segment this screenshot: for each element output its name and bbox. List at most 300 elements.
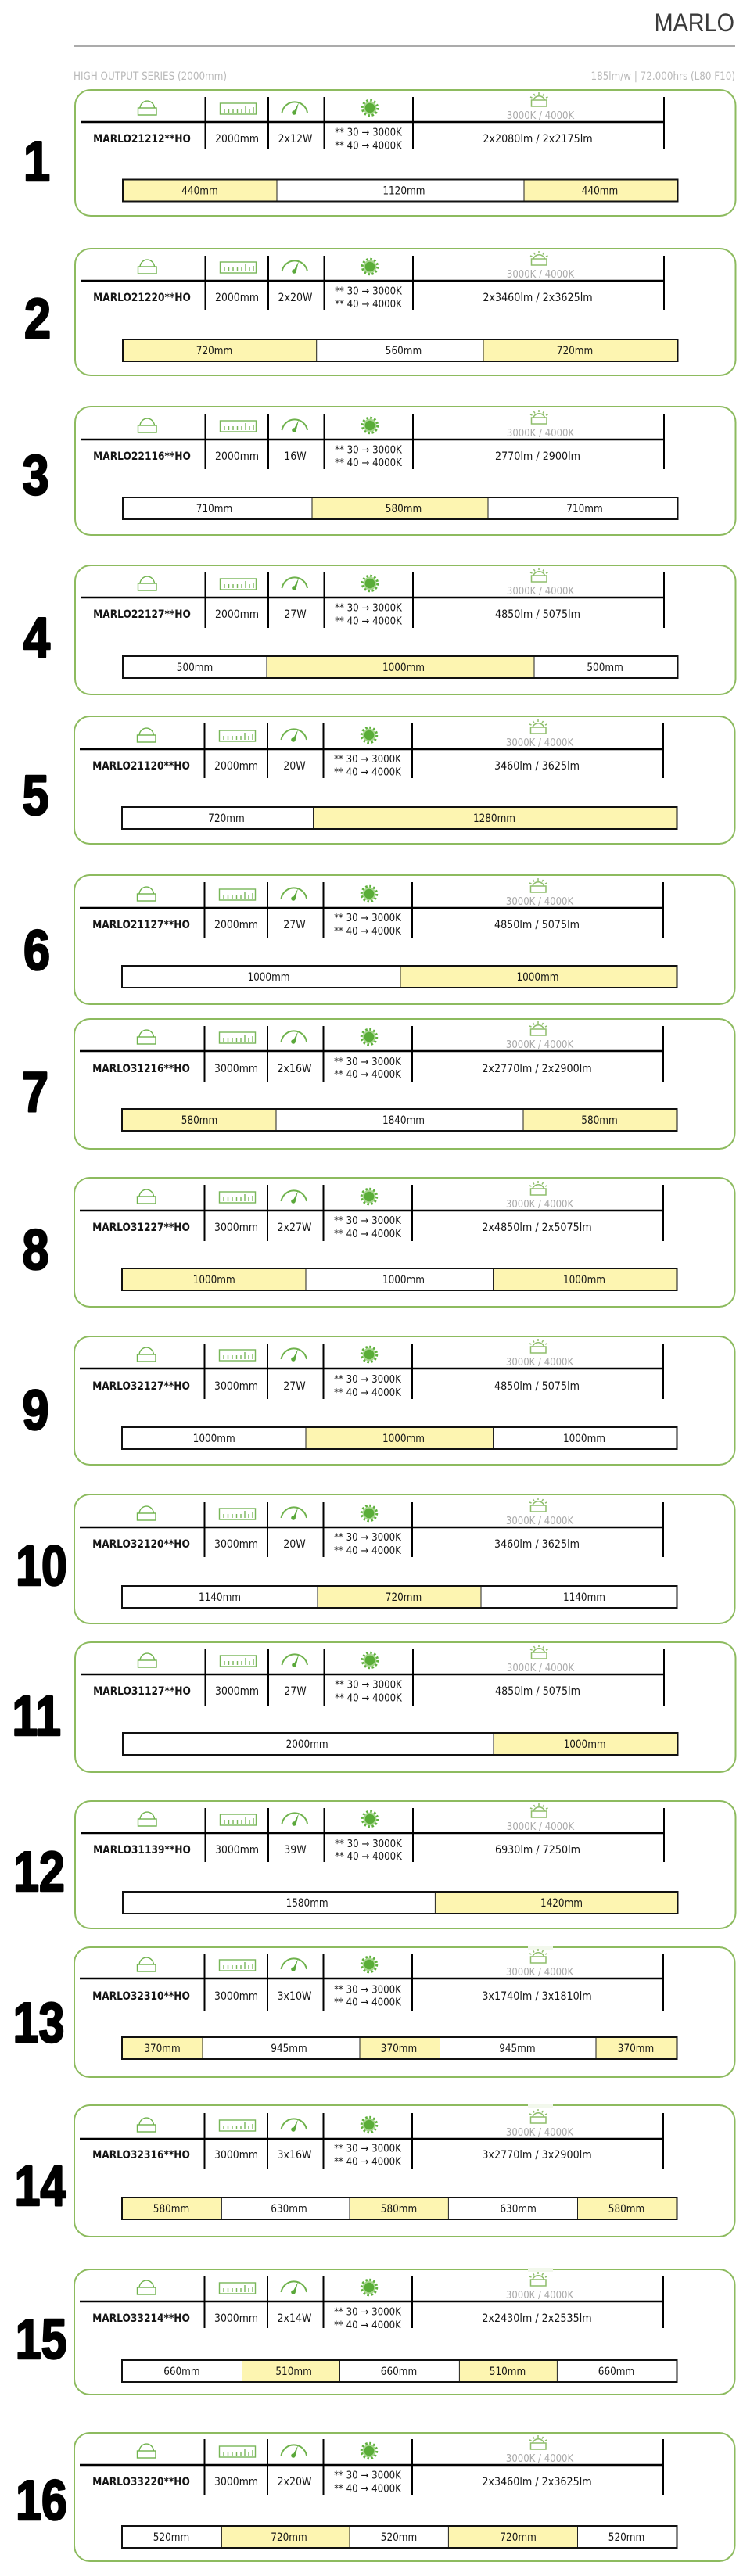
colour codes: ** 40 → 4000K bbox=[335, 615, 403, 627]
icon: ruler bbox=[221, 579, 257, 590]
icon: lit lamp bbox=[530, 1803, 547, 1817]
colour temperature heading: 3000K / 4000K bbox=[506, 895, 574, 907]
length bar: 1000mm bbox=[382, 1433, 425, 1445]
icon: sun bbox=[361, 1957, 377, 1972]
length bar: 510mm bbox=[490, 2366, 526, 2378]
icon: gauge bbox=[282, 1958, 307, 1971]
power: 39W bbox=[284, 1844, 307, 1857]
colour codes bbox=[334, 1983, 402, 2008]
model: MARLO22127**HO bbox=[93, 608, 191, 621]
length: 2000mm bbox=[214, 760, 258, 773]
lumen output: 3460lm / 3625lm bbox=[494, 760, 580, 773]
length bar: 370mm bbox=[381, 2043, 417, 2055]
colour codes bbox=[335, 285, 403, 310]
length bar: 1000mm bbox=[382, 1274, 425, 1286]
colour temperature heading: 3000K / 4000K bbox=[506, 737, 574, 748]
length bar bbox=[122, 1427, 677, 1449]
icon: lamp bbox=[138, 101, 156, 115]
power: 27W bbox=[283, 1380, 306, 1393]
icon: lit lamp bbox=[529, 2109, 547, 2123]
colour codes: ** 40 → 4000K bbox=[335, 139, 403, 152]
length bar: 580mm bbox=[181, 1114, 217, 1127]
colour codes bbox=[334, 911, 402, 937]
icon: lamp bbox=[138, 887, 156, 901]
power: 2x27W bbox=[278, 1222, 311, 1234]
length bar: 710mm bbox=[566, 503, 603, 515]
length bar: 580mm bbox=[153, 2203, 189, 2215]
number 16: 16 bbox=[16, 2468, 67, 2531]
number 7: 7 bbox=[22, 1061, 48, 1124]
table grid bbox=[80, 1502, 663, 1557]
lumen output: 6930lm / 7250lm bbox=[495, 1844, 580, 1857]
colour temperature heading: 3000K / 4000K bbox=[506, 2289, 574, 2301]
colour codes: ** 40 → 4000K bbox=[335, 1849, 403, 1862]
icon: sun bbox=[361, 1029, 377, 1045]
power: 20W bbox=[283, 1538, 306, 1551]
length bar: 720mm bbox=[208, 813, 245, 825]
model: MARLO22116**HO bbox=[93, 450, 191, 463]
length bar bbox=[122, 966, 677, 988]
length bar bbox=[122, 1109, 677, 1131]
lumen output: 2x2770lm / 2x2900lm bbox=[482, 1063, 592, 1075]
table grid bbox=[81, 414, 664, 469]
icon: sun bbox=[361, 2118, 377, 2132]
length bar: 720mm bbox=[271, 2531, 307, 2544]
colour temperature heading: 3000K / 4000K bbox=[507, 585, 575, 597]
colour codes: ** 40 → 4000K bbox=[334, 1067, 402, 1080]
length bar bbox=[123, 1892, 677, 1914]
length: 3000mm bbox=[214, 2476, 258, 2488]
panel 7 bbox=[74, 1019, 735, 1149]
icon: sun bbox=[361, 2280, 377, 2294]
icon: sun bbox=[361, 1347, 377, 1362]
header rule bbox=[74, 45, 735, 47]
number 5: 5 bbox=[22, 765, 49, 827]
number 12: 12 bbox=[13, 1839, 65, 1903]
table grid bbox=[80, 1946, 663, 2011]
length bar: 1120mm bbox=[382, 185, 425, 198]
power: 2x20W bbox=[278, 2476, 311, 2488]
table grid bbox=[80, 723, 663, 778]
lumen output: 2x3460lm / 2x3625lm bbox=[482, 2476, 592, 2488]
length bar: 1580mm bbox=[286, 1897, 328, 1910]
length bar: 500mm bbox=[587, 662, 623, 674]
icon: gauge bbox=[282, 1031, 307, 1044]
table grid bbox=[81, 97, 664, 149]
length bar: 720mm bbox=[500, 2531, 537, 2544]
length: 3000mm bbox=[214, 1063, 258, 1075]
colour codes bbox=[334, 752, 402, 778]
length: 2000mm bbox=[215, 608, 259, 621]
icon: lit lamp bbox=[529, 878, 547, 892]
colour codes: ** 40 → 4000K bbox=[334, 924, 402, 937]
length bar bbox=[122, 2197, 677, 2219]
length: 3000mm bbox=[214, 1990, 258, 2003]
length bar bbox=[123, 656, 677, 678]
model: MARLO32310**HO bbox=[92, 1990, 190, 2003]
model: MARLO31216**HO bbox=[92, 1063, 190, 1075]
power: 2x20W bbox=[278, 292, 312, 304]
icon: lamp bbox=[138, 260, 156, 274]
icon: sun bbox=[361, 2443, 377, 2459]
panel 15 bbox=[74, 2268, 735, 2395]
length bar: 1000mm bbox=[563, 1274, 605, 1286]
length bar: 440mm bbox=[181, 185, 218, 198]
icon: lamp bbox=[138, 1506, 156, 1520]
length bar bbox=[122, 1586, 677, 1608]
table grid bbox=[80, 2104, 663, 2169]
length bar: 720mm bbox=[386, 1591, 422, 1604]
length bar: 1000mm bbox=[564, 1738, 606, 1751]
colour codes: ** 30 → 3000K bbox=[335, 443, 403, 456]
length bar: 1000mm bbox=[382, 662, 425, 674]
panel 8 bbox=[74, 1178, 735, 1307]
icon: lamp bbox=[138, 1957, 156, 1971]
colour temperature heading: 3000K / 4000K bbox=[507, 1821, 575, 1832]
colour temperature heading: 3000K / 4000K bbox=[507, 268, 575, 280]
length: 2000mm bbox=[215, 133, 259, 145]
length: 3000mm bbox=[214, 2149, 258, 2162]
colour codes: ** 30 → 3000K bbox=[334, 1214, 402, 1226]
model: MARLO21212**HO bbox=[93, 133, 191, 145]
length bar: 1840mm bbox=[382, 1114, 425, 1127]
icon: gauge bbox=[282, 729, 307, 742]
length bar: 945mm bbox=[499, 2043, 536, 2055]
length: 3000mm bbox=[214, 1538, 258, 1551]
power: 27W bbox=[284, 1685, 307, 1698]
length bar: 440mm bbox=[582, 185, 618, 198]
colour codes bbox=[325, 2305, 411, 2332]
icon: lit lamp bbox=[529, 1498, 547, 1512]
length bar bbox=[123, 180, 677, 202]
table grid bbox=[81, 1649, 664, 1706]
number 1: 1 bbox=[23, 131, 50, 193]
length bar: 580mm bbox=[381, 2203, 417, 2215]
icon: sun bbox=[363, 576, 377, 591]
colour codes: ** 30 → 3000K bbox=[335, 126, 403, 138]
model: MARLO32127**HO bbox=[92, 1380, 190, 1393]
colour temperature heading: 3000K / 4000K bbox=[506, 2126, 574, 2138]
colour codes: ** 40 → 4000K bbox=[334, 2319, 402, 2331]
colour codes: ** 30 → 3000K bbox=[334, 911, 402, 924]
panel 2 bbox=[75, 249, 735, 375]
length bar: 370mm bbox=[144, 2043, 181, 2055]
number 15: 15 bbox=[16, 2307, 66, 2370]
frame bbox=[74, 1178, 735, 1307]
icon: ruler bbox=[219, 2283, 255, 2294]
colour codes: ** 30 → 3000K bbox=[334, 2142, 402, 2154]
lumen output: 3x2770lm / 3x2900lm bbox=[482, 2149, 592, 2162]
length bar: 1140mm bbox=[199, 1591, 241, 1604]
icon: ruler bbox=[221, 1814, 257, 1825]
model: MARLO31127**HO bbox=[93, 1685, 191, 1698]
colour codes bbox=[334, 1372, 402, 1398]
length bar: 560mm bbox=[386, 345, 422, 357]
colour codes bbox=[335, 1678, 403, 1704]
colour codes: ** 30 → 3000K bbox=[334, 2305, 402, 2318]
frame bbox=[74, 1947, 735, 2077]
length: 2000mm bbox=[215, 450, 259, 463]
length bar bbox=[122, 1268, 677, 1290]
length bar: 630mm bbox=[500, 2203, 537, 2215]
icon: gauge bbox=[282, 419, 307, 432]
colour codes: ** 40 → 4000K bbox=[335, 1692, 403, 1704]
model: MARLO31139**HO bbox=[93, 1844, 191, 1857]
icon: lit lamp bbox=[530, 1645, 547, 1659]
colour codes: ** 40 → 4000K bbox=[334, 1544, 402, 1556]
length bar: 500mm bbox=[177, 662, 213, 674]
colour codes: ** 40 → 4000K bbox=[334, 2482, 402, 2495]
icon: gauge bbox=[282, 260, 307, 274]
length bar bbox=[123, 339, 677, 361]
length bar bbox=[122, 2360, 677, 2382]
length: 3000mm bbox=[215, 1685, 259, 1698]
power: 2x16W bbox=[278, 1063, 311, 1075]
length: 3000mm bbox=[214, 2312, 258, 2325]
colour temperature heading: 3000K / 4000K bbox=[507, 427, 575, 439]
icon: lit lamp bbox=[529, 1181, 547, 1195]
colour codes: ** 30 → 3000K bbox=[334, 752, 402, 765]
length bar: 2000mm bbox=[286, 1738, 328, 1751]
table grid bbox=[81, 256, 664, 310]
lumen output: 2770lm / 2900lm bbox=[495, 450, 580, 463]
panel 10 bbox=[74, 1494, 735, 1623]
icon: lit lamp bbox=[529, 1021, 547, 1035]
colour codes: ** 30 → 3000K bbox=[335, 1837, 403, 1849]
icon: gauge bbox=[282, 1654, 307, 1667]
power: 3x10W bbox=[278, 1990, 311, 2003]
length: 2000mm bbox=[214, 919, 258, 931]
icon: lamp bbox=[138, 1347, 156, 1362]
length: 3000mm bbox=[214, 1380, 258, 1393]
lumen output: 2x4850lm / 2x5075lm bbox=[482, 1222, 592, 1234]
icon: ruler bbox=[219, 1350, 255, 1361]
colour codes bbox=[335, 443, 403, 468]
colour temperature heading: 3000K / 4000K bbox=[506, 1515, 574, 1527]
frame bbox=[74, 2269, 735, 2395]
frame bbox=[74, 875, 735, 1004]
colour temperature heading: 3000K / 4000K bbox=[506, 2452, 574, 2464]
colour codes: ** 30 → 3000K bbox=[334, 2469, 402, 2481]
table grid bbox=[80, 2439, 663, 2495]
icon: lamp bbox=[138, 1030, 156, 1044]
colour codes: ** 30 → 3000K bbox=[334, 1055, 402, 1067]
icon: sun bbox=[361, 1506, 377, 1520]
icon: gauge bbox=[282, 2119, 307, 2132]
number 2: 2 bbox=[24, 288, 51, 350]
icon: lamp bbox=[138, 2280, 156, 2294]
icon: gauge bbox=[282, 1348, 307, 1362]
icon: ruler bbox=[219, 1192, 255, 1203]
length bar: 720mm bbox=[196, 345, 232, 357]
length bar: 1140mm bbox=[563, 1591, 605, 1604]
icon: ruler bbox=[221, 1656, 257, 1667]
icon: lamp bbox=[138, 1653, 156, 1667]
length: 3000mm bbox=[214, 1222, 258, 1234]
panel 16 bbox=[74, 2433, 735, 2561]
frame bbox=[74, 1494, 735, 1623]
length bar: 720mm bbox=[557, 345, 593, 357]
series subtitle: HIGH OUTPUT SERIES (2000mm) bbox=[74, 70, 227, 83]
table grid bbox=[80, 882, 663, 938]
colour temperature heading: 3000K / 4000K bbox=[506, 1966, 574, 1978]
frame bbox=[74, 1336, 735, 1465]
icon: lit lamp bbox=[530, 568, 547, 582]
icon: lit lamp bbox=[529, 1949, 547, 1963]
lumen output: 3x1740lm / 3x1810lm bbox=[482, 1990, 592, 2003]
power: 27W bbox=[284, 608, 307, 621]
colour codes: ** 40 → 4000K bbox=[335, 297, 403, 310]
lumen output: 2x3460lm / 2x3625lm bbox=[483, 292, 593, 304]
panel 3 bbox=[75, 407, 735, 535]
icon: lit lamp bbox=[530, 410, 547, 424]
power: 16W bbox=[284, 450, 307, 463]
colour codes: ** 40 → 4000K bbox=[334, 1996, 402, 2008]
table grid bbox=[80, 1344, 663, 1399]
length: 2000mm bbox=[215, 292, 259, 304]
panel 12 bbox=[75, 1801, 735, 1928]
length bar: 630mm bbox=[271, 2203, 307, 2215]
number 6: 6 bbox=[23, 920, 50, 982]
panel 9 bbox=[74, 1336, 735, 1465]
frame bbox=[74, 716, 735, 844]
icon: gauge bbox=[282, 1507, 307, 1520]
colour temperature heading: 3000K / 4000K bbox=[506, 1198, 574, 1210]
colour codes: ** 40 → 4000K bbox=[334, 1386, 402, 1398]
icon: sun bbox=[363, 100, 377, 116]
model: MARLO21220**HO bbox=[93, 292, 191, 304]
length bar: 660mm bbox=[163, 2366, 200, 2378]
icon: gauge bbox=[282, 1813, 307, 1826]
number 4: 4 bbox=[23, 607, 50, 669]
icon: gauge bbox=[282, 2445, 307, 2458]
number 11: 11 bbox=[12, 1684, 61, 1747]
icon: lamp bbox=[138, 1189, 156, 1204]
icon: lit lamp bbox=[529, 1339, 547, 1353]
number 8: 8 bbox=[22, 1219, 49, 1282]
frame bbox=[75, 565, 735, 694]
length bar: 370mm bbox=[618, 2043, 654, 2055]
colour codes bbox=[325, 126, 412, 153]
icon: lit lamp bbox=[529, 2435, 547, 2449]
model: MARLO33220**HO bbox=[92, 2476, 190, 2488]
lumen output: 3460lm / 3625lm bbox=[494, 1538, 580, 1551]
icon: ruler bbox=[219, 2120, 255, 2131]
title: MARLO bbox=[655, 9, 734, 37]
icon: ruler bbox=[221, 103, 257, 114]
colour codes bbox=[334, 2469, 402, 2495]
icon: lit lamp bbox=[530, 92, 547, 106]
colour codes bbox=[334, 1214, 402, 1240]
length bar bbox=[122, 807, 677, 829]
panel 4 bbox=[75, 565, 735, 694]
length bar: 660mm bbox=[381, 2366, 417, 2378]
length bar: 520mm bbox=[381, 2531, 417, 2544]
length bar: 660mm bbox=[598, 2366, 634, 2378]
length bar: 1420mm bbox=[540, 1897, 583, 1910]
length bar: 580mm bbox=[581, 1114, 618, 1127]
icon: lamp bbox=[138, 2118, 156, 2132]
icon: gauge bbox=[282, 1190, 307, 1204]
length bar: 1000mm bbox=[247, 971, 290, 984]
colour codes: ** 40 → 4000K bbox=[334, 2155, 402, 2168]
panel 5 bbox=[74, 716, 735, 844]
colour codes: ** 30 → 3000K bbox=[335, 1678, 403, 1691]
number 9: 9 bbox=[22, 1379, 49, 1442]
icon: sun bbox=[363, 1811, 377, 1827]
number 10: 10 bbox=[16, 1534, 67, 1597]
icon: ruler bbox=[219, 1960, 255, 1971]
icon: gauge bbox=[282, 577, 307, 590]
frame bbox=[75, 1801, 735, 1928]
icon: lamp bbox=[138, 418, 156, 432]
panel 11 bbox=[75, 1642, 735, 1772]
colour codes: ** 40 → 4000K bbox=[335, 456, 403, 468]
length bar: 1000mm bbox=[193, 1433, 235, 1445]
panel 13 bbox=[74, 1946, 735, 2077]
lumen output: 4850lm / 5075lm bbox=[495, 1685, 580, 1698]
panel 6 bbox=[74, 875, 735, 1004]
colour temperature heading: 3000K / 4000K bbox=[506, 1356, 574, 1368]
icon: ruler bbox=[219, 1032, 255, 1043]
lumen output: 4850lm / 5075lm bbox=[494, 919, 580, 931]
icon: lamp bbox=[138, 728, 156, 742]
model: MARLO21120**HO bbox=[92, 760, 190, 773]
length bar: 1280mm bbox=[473, 813, 515, 825]
length bar: 510mm bbox=[275, 2366, 312, 2378]
model: MARLO33214**HO bbox=[92, 2312, 190, 2325]
table grid bbox=[81, 572, 664, 628]
colour codes: ** 40 → 4000K bbox=[334, 1227, 402, 1240]
icon: lit lamp bbox=[529, 719, 547, 734]
colour codes: ** 30 → 3000K bbox=[334, 1372, 402, 1385]
model: MARLO32120**HO bbox=[92, 1538, 190, 1551]
number 13: 13 bbox=[13, 1990, 64, 2054]
lumen output: 4850lm / 5075lm bbox=[494, 1380, 580, 1393]
frame bbox=[75, 249, 735, 375]
frame bbox=[75, 1642, 735, 1772]
icon: ruler bbox=[219, 730, 255, 741]
table grid bbox=[81, 1808, 664, 1862]
colour codes bbox=[335, 601, 403, 627]
length bar: 520mm bbox=[153, 2531, 189, 2544]
icon: sun bbox=[361, 1189, 377, 1204]
colour codes: ** 30 → 3000K bbox=[334, 1530, 402, 1543]
model: MARLO21127**HO bbox=[92, 919, 190, 931]
table grid bbox=[80, 1185, 663, 1241]
length bar bbox=[123, 497, 677, 519]
lumen output: 2x2080lm / 2x2175lm bbox=[483, 133, 593, 145]
frame bbox=[75, 90, 735, 216]
model: MARLO31227**HO bbox=[92, 1222, 190, 1234]
number 3: 3 bbox=[22, 444, 49, 507]
panel 14 bbox=[74, 2104, 735, 2237]
icon: ruler bbox=[221, 421, 257, 432]
power: 2x12W bbox=[278, 133, 312, 145]
icon: sun bbox=[361, 887, 377, 901]
colour codes: ** 30 → 3000K bbox=[335, 601, 403, 614]
frame bbox=[74, 2105, 735, 2237]
table grid bbox=[80, 1026, 663, 1082]
length bar: 520mm bbox=[608, 2531, 644, 2544]
icon: lit lamp bbox=[530, 251, 547, 265]
length bar: 580mm bbox=[386, 503, 422, 515]
icon: sun bbox=[361, 727, 377, 743]
length: 3000mm bbox=[215, 1844, 259, 1857]
lumen output: 4850lm / 5075lm bbox=[495, 608, 580, 621]
icon: lamp bbox=[138, 576, 156, 590]
length bar: 945mm bbox=[271, 2043, 307, 2055]
